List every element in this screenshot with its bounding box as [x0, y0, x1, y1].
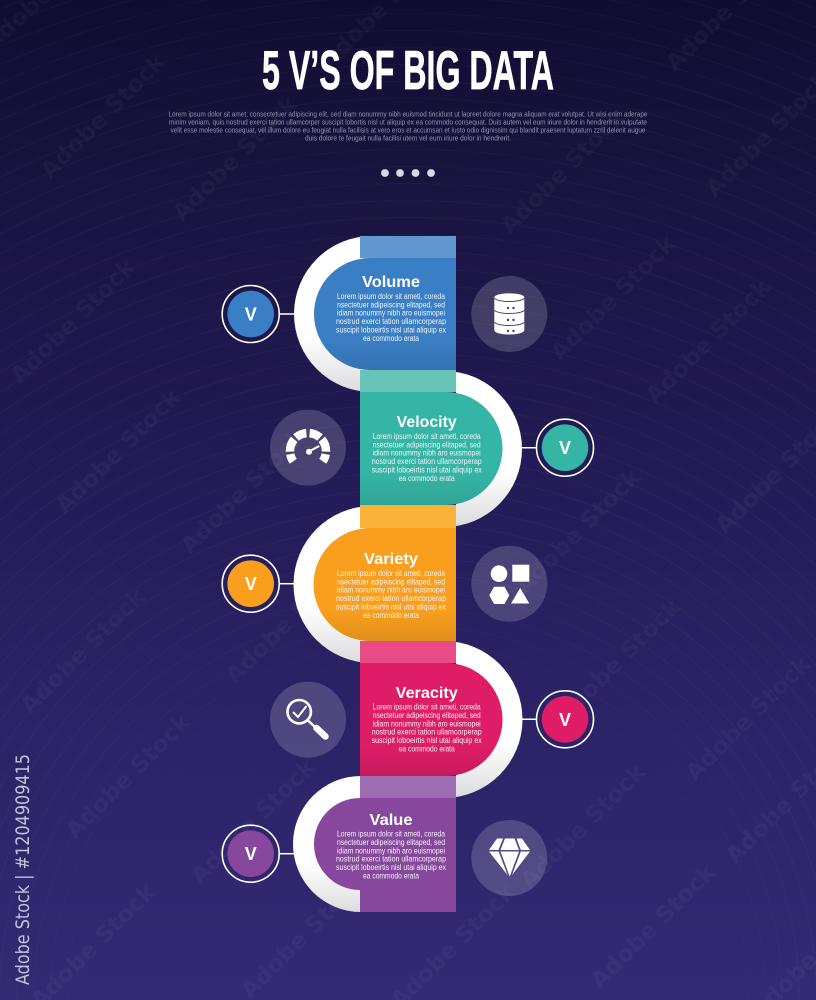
panel: value: ea commodo erata	[363, 872, 420, 880]
panel: variety: nostrud exerci tation ullamcorperap	[336, 594, 447, 603]
panel: variety: nsectetuer adipeiscing elitaped, sed	[337, 577, 445, 586]
panel: variety: Lorem ipsum dolor sit ameti, coreda	[337, 569, 446, 578]
badge: variety V: V	[245, 574, 257, 594]
watermarks: Adobe Stock	[511, 464, 646, 599]
pagination dots	[381, 169, 435, 177]
badge: volume V: V	[245, 304, 257, 324]
icon: magnifier with check	[270, 682, 346, 758]
watermarks: Adobe Stock	[551, 594, 686, 729]
panel: value: Value	[370, 812, 413, 829]
badge: variety V	[222, 555, 295, 612]
panel: volume: Volume	[362, 274, 420, 291]
intro paragraph: velit esse molestie consequat, vel illum dolore eu feugiat nulla facilisis at vero eros et accumsan et iusto odio dignissim qui blandit praesent luptatum zzril delenit augue	[170, 126, 646, 134]
panel: volume: suscipit loboeirtis nisl utai aliquip ex	[336, 325, 446, 334]
panel: veracity	[360, 641, 502, 776]
watermarks: Adobe Stock	[641, 274, 776, 409]
panel: volume: nsectetuer adipeiscing elitaped, sed	[337, 300, 445, 309]
title: 5 V’S OF BIG DATA	[262, 39, 554, 101]
panel: variety: suscipit loboeirtis nisl utai aliquip ex	[336, 602, 446, 611]
panel: variety	[314, 505, 456, 641]
icon: diamond	[471, 820, 547, 896]
badge: value V: V	[245, 844, 257, 864]
panel: value: idiam nonummy nibh aro euismopei	[337, 846, 445, 855]
panel: value: Lorem ipsum dolor sit ameti, coreda	[337, 830, 446, 839]
icon: speedometer gauge	[270, 410, 346, 486]
watermarks: Adobe Stock	[6, 254, 141, 389]
panel: velocity: nostrud exerci tation ullamcorperap	[372, 457, 482, 466]
panel: velocity: nsectetuer adipeiscing elitaped, sed	[373, 440, 481, 449]
icon: shapes	[471, 546, 547, 622]
panel: value: suscipit loboeirtis nisl utai aliquip ex	[336, 863, 446, 872]
white connecting rings	[293, 236, 522, 912]
panel: variety: Variety	[364, 551, 418, 568]
panel: velocity: Velocity	[397, 414, 457, 431]
watermarks: Adobe Stock	[546, 231, 681, 366]
panel: veracity: Veracity	[396, 685, 458, 702]
watermarks: Adobe Stock	[36, 49, 171, 184]
badge: velocity V	[520, 419, 594, 476]
panel: value: nsectetuer adipeiscing elitaped, sed	[337, 838, 445, 847]
panel: velocity	[360, 370, 502, 505]
panel: volume	[314, 236, 456, 370]
badge: veracity V	[520, 691, 594, 748]
panel: volume: nostrud exerci tation ullamcorperap	[336, 317, 447, 326]
intro paragraph	[168, 110, 648, 142]
panel: veracity: Lorem ipsum dolor sit ameti, coreda	[373, 703, 481, 712]
intro paragraph: minim veniam, quis nostrud exerci tation ullamcorper suscipit lobortis nisl ut aliquip ex ea commodo consequat. Duis autem vel eum iriure dolor in hendrerit in vulputate	[169, 118, 647, 126]
panel: volume: idiam nonummy nibh aro euismopei	[337, 309, 445, 318]
badge: value V	[222, 825, 295, 882]
watermarks: Adobe Stock	[496, 104, 631, 239]
panel: variety: idiam nonummy nibh aro euismopei	[337, 586, 445, 595]
watermarks: Adobe Stock	[681, 651, 816, 786]
panel: veracity: suscipit loboeirtis nisl utai aliquip ex	[372, 736, 482, 745]
watermarks: Adobe Stock	[586, 859, 721, 994]
badge: veracity V: V	[559, 710, 571, 730]
panel: velocity: idiam nonummy nibh aro euismopei	[373, 449, 481, 458]
stock id label: Adobe Stock | #1204909415	[12, 754, 34, 985]
panel: veracity: ea commodo erata	[399, 744, 455, 754]
watermarks: Adobe Stock	[516, 759, 651, 894]
panel: veracity: nostrud exerci tation ullamcorperap	[372, 728, 482, 737]
panel: veracity: nsectetuer adipeiscing elitaped, sed	[373, 711, 481, 720]
watermarks: Adobe Stock	[176, 424, 311, 559]
panel: value	[314, 776, 456, 912]
watermarks: Adobe Stock	[16, 584, 151, 719]
panel: variety: ea commodo erata	[363, 611, 420, 620]
panel: velocity: Lorem ipsum dolor sit ameti, coreda	[373, 432, 481, 441]
badge: volume V	[222, 286, 295, 342]
icon: database	[471, 276, 547, 352]
watermarks: Adobe Stock	[168, 91, 303, 226]
watermarks: Adobe Stock	[51, 384, 186, 519]
panel: volume: ea commodo erata	[363, 334, 420, 343]
intro paragraph: Lorem ipsum dolor sit amet, consectetuer adipiscing elit, sed diam nonummy nibh euismod tincidunt ut laoreet dolore magna aliquam erat volutpat. Ut wisi enim aderape	[168, 110, 648, 118]
intro paragraph: duis dolore te feugait nulla facilisi utem vel eum iriure dolor in hendrerit.	[305, 134, 511, 142]
badge: velocity V: V	[559, 438, 571, 458]
watermarks: Adobe Stock	[61, 709, 196, 844]
panel: velocity: suscipit loboeirtis nisl utai aliquip ex	[372, 465, 482, 474]
panel: velocity: ea commodo erata	[399, 474, 455, 483]
panel: veracity: idiam nonummy nibh aro euismopei	[373, 719, 481, 728]
watermarks: Adobe Stock	[221, 554, 356, 689]
panel: volume: Lorem ipsum dolor sit ameti, coreda	[337, 292, 446, 301]
watermarks: Adobe Stock	[186, 754, 321, 889]
panel: value: nostrud exerci tation ullamcorperap	[336, 855, 447, 864]
